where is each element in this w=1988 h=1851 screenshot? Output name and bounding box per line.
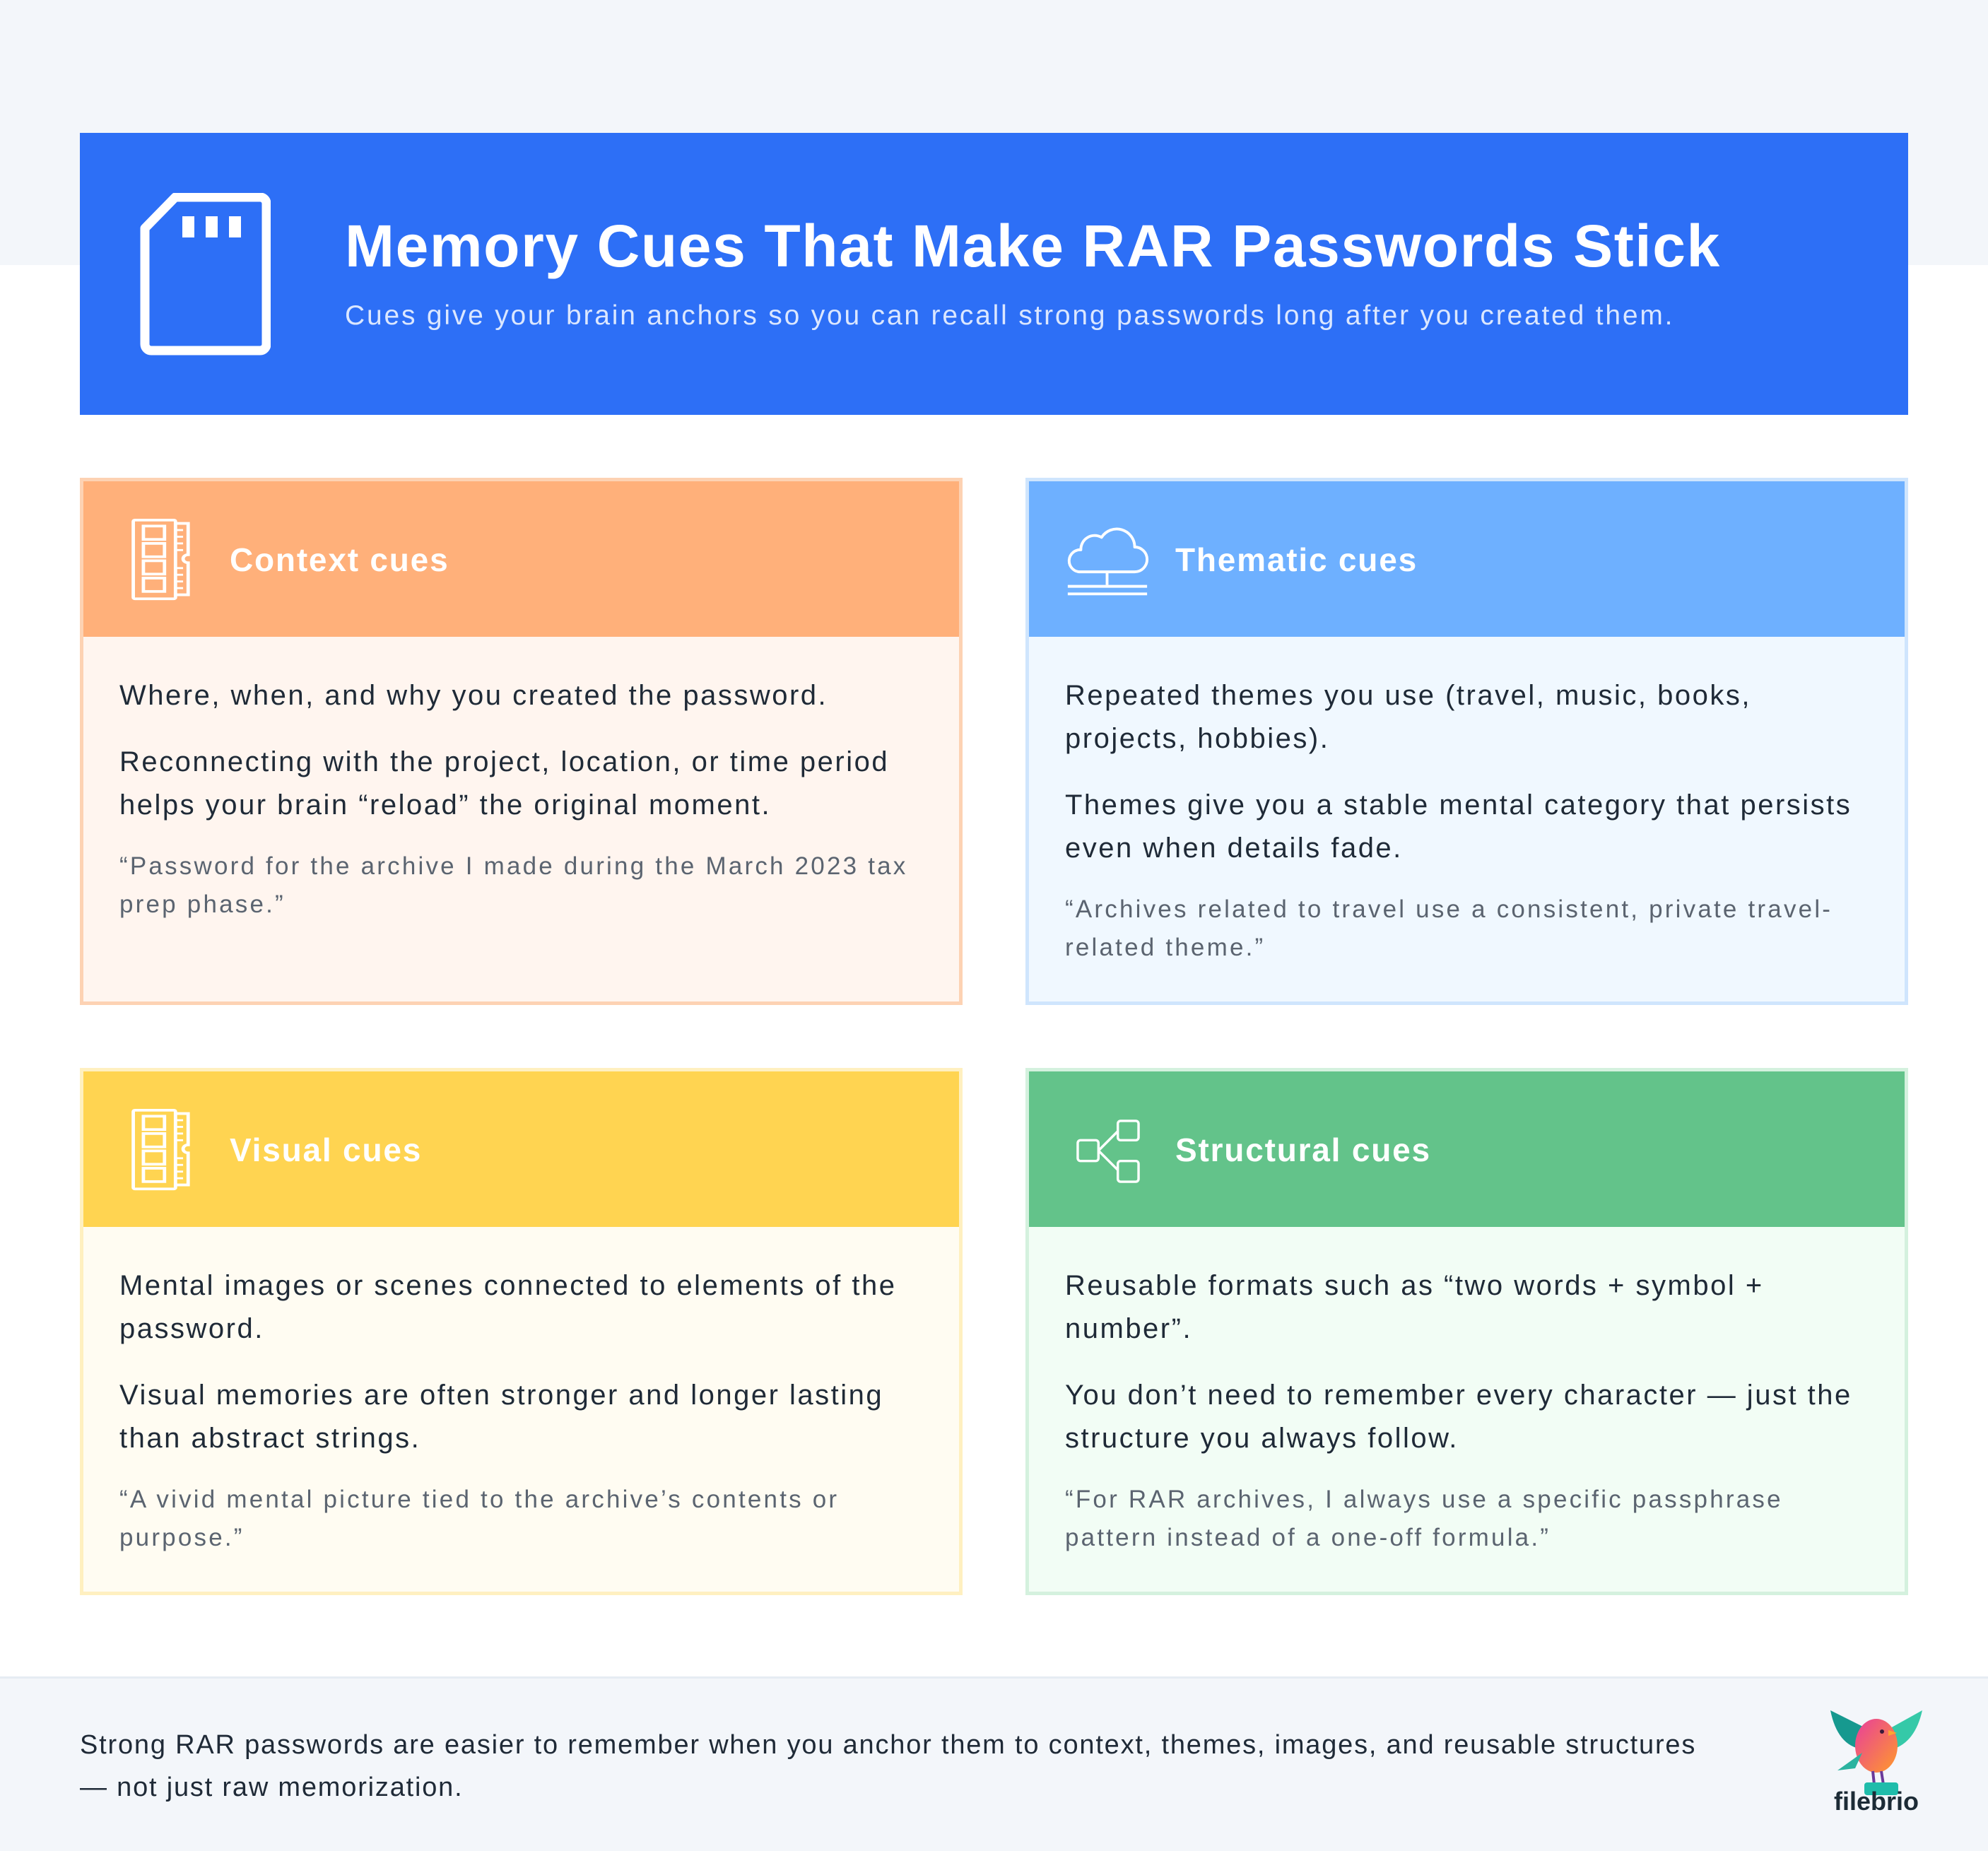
- icon: cloud network: [1067, 527, 1149, 595]
- footer summary text: Strong RAR passwords are easier to remember when you anchor them to context, themes, images, and reusable structures: [80, 1730, 1696, 1760]
- card body: thematic cues: Repeated themes you use (travel, music, books,: [1065, 680, 1751, 711]
- card body: visual cues: Mental images or scenes connected to elements of the: [119, 1270, 896, 1301]
- footer summary text: [80, 1730, 1696, 1802]
- card body: visual cues: [119, 1270, 896, 1551]
- card body: structural cues: You don’t need to remember every character — just the: [1065, 1380, 1852, 1411]
- card body: thematic cues: [1065, 680, 1852, 961]
- card body: structural cues: “For RAR archives, I always use a specific passphrase: [1065, 1486, 1783, 1513]
- card body: context cues: Where, when, and why you created the password.: [119, 680, 828, 711]
- icon: memory module: [131, 1109, 190, 1190]
- card body: context cues: helps your brain “reload” the original moment.: [119, 789, 771, 821]
- subtitle: Cues give your brain anchors so you can recall strong passwords long after you created them.: [345, 300, 1674, 331]
- card header: context cues: Context cues: [230, 541, 449, 578]
- card header: context cues: [83, 481, 959, 637]
- panel: structural cues: [1025, 1068, 1908, 1595]
- card body: context cues: Reconnecting with the project, location, or time period: [119, 746, 889, 777]
- card body: visual cues: “A vivid mental picture tied to the archive’s contents or: [119, 1486, 839, 1513]
- card body: structural cues: structure you always follow.: [1065, 1423, 1459, 1454]
- card header: visual cues: [83, 1071, 959, 1227]
- card body: visual cues: than abstract strings.: [119, 1423, 420, 1454]
- card body: context cues: “Password for the archive I made during the March 2023 tax: [119, 852, 908, 880]
- card header: thematic cues: Thematic cues: [1175, 541, 1418, 578]
- card body: structural cues: [1065, 1270, 1852, 1551]
- icon: sd card: [140, 193, 271, 355]
- panel: context cues: [80, 478, 963, 1005]
- header banner: [80, 133, 1908, 415]
- icon: branching structure: [1076, 1120, 1140, 1183]
- logo: filebrio: filebrio: [1834, 1787, 1919, 1816]
- card body: visual cues: purpose.”: [119, 1524, 245, 1551]
- card body: context cues: prep phase.”: [119, 891, 286, 918]
- card body: visual cues: password.: [119, 1313, 264, 1344]
- footer summary text: — not just raw memorization.: [80, 1773, 463, 1802]
- title: Memory Cues That Make RAR Passwords Stick: [345, 213, 1721, 279]
- card body: thematic cues: Themes give you a stable mental category that persists: [1065, 789, 1852, 821]
- card body: thematic cues: even when details fade.: [1065, 833, 1403, 864]
- card body: thematic cues: related theme.”: [1065, 934, 1265, 961]
- card header: visual cues: Visual cues: [230, 1132, 422, 1168]
- card body: thematic cues: “Archives related to travel use a consistent, private travel-: [1065, 895, 1833, 923]
- panel: thematic cues: [1025, 478, 1908, 1005]
- panel: visual cues: [80, 1068, 963, 1595]
- card body: visual cues: Visual memories are often stronger and longer lasting: [119, 1380, 883, 1411]
- card body: structural cues: number”.: [1065, 1313, 1192, 1344]
- card header: structural cues: [1029, 1071, 1905, 1227]
- card body: structural cues: Reusable formats such as “two words + symbol +: [1065, 1270, 1764, 1301]
- card header: thematic cues: [1029, 481, 1905, 637]
- icon: memory module: [131, 519, 190, 601]
- logo: filebrio: [1830, 1710, 1922, 1816]
- card body: thematic cues: projects, hobbies).: [1065, 723, 1329, 754]
- footer: [0, 1676, 1988, 1851]
- card header: structural cues: Structural cues: [1175, 1132, 1431, 1168]
- card body: context cues: [119, 680, 908, 918]
- card body: structural cues: pattern instead of a one-off formula.”: [1065, 1524, 1551, 1551]
